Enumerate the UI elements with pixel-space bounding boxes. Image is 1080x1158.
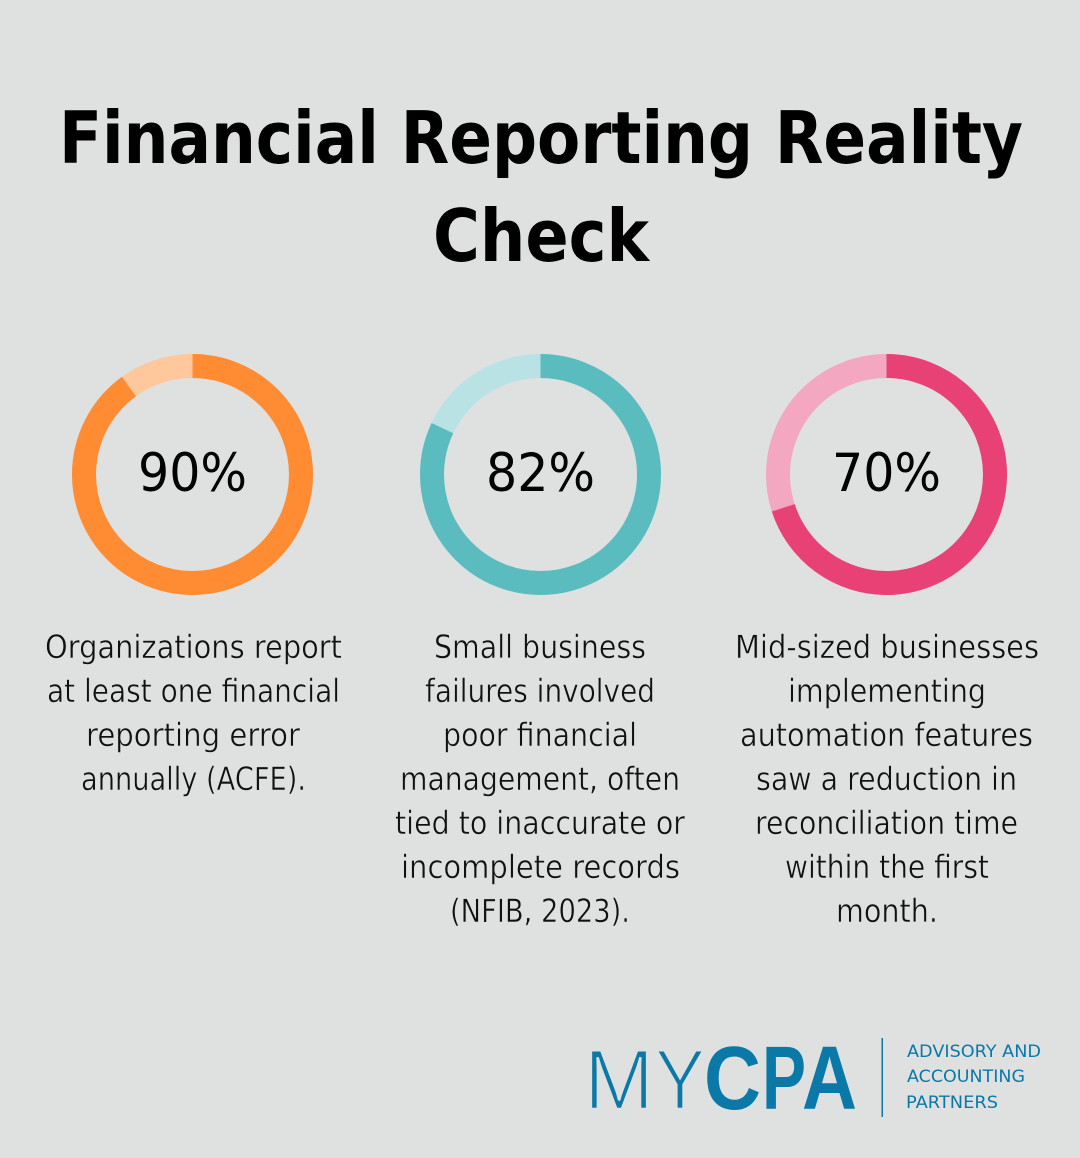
logo wordmark — [584, 1029, 857, 1129]
description: small business: poor financial — [443, 716, 637, 754]
donut chart: 90% — [84, 366, 301, 583]
description: small business: tied to inaccurate or — [395, 804, 686, 842]
description: mid-sized businesses: automation features — [740, 716, 1033, 754]
logo tagline — [906, 1042, 1041, 1112]
description: organizations: annually (ACFE). — [81, 760, 306, 798]
logo: MYCPA — [584, 1029, 1041, 1129]
description: organizations: Organizations report — [45, 628, 342, 666]
donut chart: 82% — [432, 366, 649, 583]
description: small business: (NFIB, 2023). — [450, 892, 630, 930]
description: small business: Small business — [434, 628, 646, 666]
description: mid-sized businesses: Mid-sized businesses — [735, 628, 1039, 666]
description: mid-sized businesses: implementing — [788, 672, 986, 710]
panel: 70% stat — [735, 366, 1039, 930]
value: 70%: 70% — [832, 443, 941, 504]
donut chart: 70% — [778, 366, 995, 583]
description: mid-sized businesses: reconciliation time — [755, 804, 1018, 842]
value: 90%: 90% — [138, 443, 247, 504]
panel: 90% stat — [45, 366, 342, 798]
logo wordmark: Y — [655, 1033, 705, 1128]
logo tagline: ACCOUNTING — [907, 1067, 1025, 1086]
description: small business: management, often — [400, 760, 680, 798]
logo wordmark: P — [762, 1029, 806, 1129]
description: mid-sized businesses: within the first — [785, 848, 989, 886]
description: mid-sized businesses: month. — [836, 892, 938, 930]
panel: 82% stat — [395, 366, 686, 930]
logo wordmark: C — [704, 1029, 761, 1129]
logo divider — [882, 1038, 883, 1117]
description: organizations: reporting error — [86, 716, 301, 754]
value: 82%: 82% — [486, 443, 595, 504]
description: mid-sized businesses: saw a reduction in — [756, 760, 1017, 798]
title — [59, 96, 1023, 278]
title: Check — [433, 194, 651, 278]
description: small business — [395, 628, 686, 930]
description: organizations — [45, 628, 342, 798]
description: small business: failures involved — [425, 672, 655, 710]
logo wordmark: A — [802, 1029, 857, 1129]
logo tagline: PARTNERS — [906, 1093, 998, 1112]
description: organizations: at least one financial — [47, 672, 340, 710]
logo wordmark: M — [584, 1033, 654, 1128]
description: small business: incomplete records — [401, 848, 680, 886]
logo tagline: ADVISORY AND — [907, 1042, 1041, 1061]
description: mid-sized businesses — [735, 628, 1039, 930]
